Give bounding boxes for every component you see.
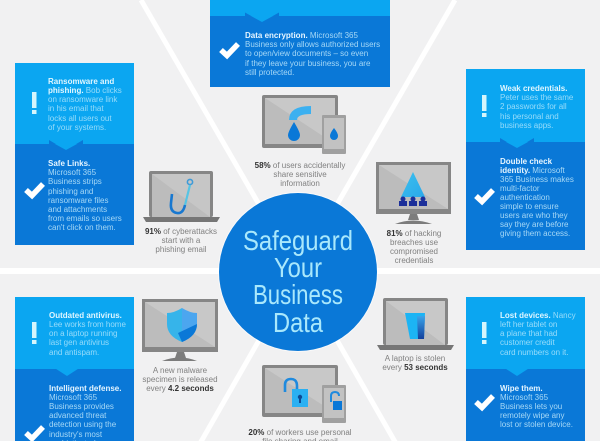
caption: 91% phishing: 91% of cyberattacks bbox=[145, 227, 217, 236]
text: weak credentials problem: Weak credentials. bbox=[500, 84, 567, 93]
panel: data encryption bbox=[210, 0, 390, 87]
panel: outdated antivirus bbox=[15, 297, 134, 441]
text: lost devices problem: a plane that had bbox=[500, 329, 557, 338]
text: wipe them solution: Microsoft 365 bbox=[500, 393, 549, 402]
caption: stolen laptop: A laptop is stolen bbox=[385, 354, 445, 363]
text: double check identity solution: giving them access. bbox=[500, 229, 570, 238]
caption: 81% credentials: 81% of hacking bbox=[387, 229, 441, 238]
icon: check mark bbox=[221, 44, 238, 56]
text: lost devices problem: customer credit bbox=[500, 338, 555, 347]
caption: stolen laptop: every 53 seconds bbox=[382, 363, 448, 372]
text: double check identity solution: simple to ensure bbox=[500, 202, 559, 211]
text: lost devices problem: Lost devices. bbox=[500, 311, 551, 320]
text: data encryption solution: still protected. bbox=[245, 68, 294, 77]
caption: malware specimen: every 4.2 seconds bbox=[146, 384, 214, 393]
text: outdated antivirus problem: Lee works from home bbox=[49, 320, 126, 329]
text: safe links solution: and attachments bbox=[48, 205, 107, 214]
icon: check mark bbox=[476, 190, 493, 202]
caption: 91% phishing: phishing email bbox=[155, 245, 207, 254]
text: outdated antivirus problem: Outdated antivirus. bbox=[49, 311, 122, 320]
text: weak credentials problem: 2 passwords for all bbox=[500, 102, 567, 111]
text: wipe them solution: Wipe them. bbox=[500, 384, 543, 393]
icon: exclamation mark bbox=[482, 95, 486, 117]
text: lost devices problem: Nancy bbox=[551, 311, 576, 320]
panel: ransomware and phishing bbox=[15, 63, 134, 245]
text: weak credentials problem: Peter uses the same bbox=[500, 93, 574, 102]
icon: monitor with shield bbox=[142, 299, 218, 361]
text: outdated antivirus problem: last gen antivirus bbox=[49, 338, 109, 347]
icon: exclamation mark bbox=[32, 322, 36, 344]
text: data encryption solution: to open/view documents – so even bbox=[245, 49, 368, 58]
icon: tablet and phone with open locks bbox=[262, 365, 346, 423]
caption: 81% credentials: breaches use bbox=[390, 238, 439, 247]
text: weak credentials problem: business apps. bbox=[500, 121, 553, 130]
text: data encryption solution: Microsoft 365 bbox=[308, 31, 358, 40]
caption: 81% credentials: compromised bbox=[390, 247, 438, 256]
caption: 58% sensitive information: share sensitive bbox=[273, 170, 327, 179]
text: double check identity solution: Microsoft bbox=[530, 166, 566, 175]
text: outdated antivirus problem: on a laptop running bbox=[49, 329, 118, 338]
text: ransomware problem: Bob clicks bbox=[84, 86, 122, 95]
icon: laptop with trash bin bbox=[377, 298, 454, 350]
text: intelligent defense solution: industry's most bbox=[49, 430, 103, 439]
caption: 58% sensitive information: 58% of users accidentally bbox=[255, 161, 345, 170]
panel: weak credentials bbox=[466, 69, 585, 250]
text: ransomware problem: on ransomware link bbox=[48, 95, 118, 104]
text: ransomware problem: phishing. bbox=[48, 86, 84, 95]
icon: laptop with fishing hook bbox=[143, 171, 220, 222]
panel: lost devices bbox=[466, 297, 585, 441]
text: safe links solution: Business strips bbox=[48, 177, 102, 186]
title text bbox=[243, 225, 353, 338]
icon: tablet and phone with leaking pipe bbox=[262, 95, 346, 154]
text: ransomware problem: of your systems. bbox=[48, 123, 106, 132]
text: ransomware problem: in his email that bbox=[48, 104, 104, 113]
caption: malware specimen: A new malware bbox=[153, 366, 208, 375]
title text: Your bbox=[274, 252, 322, 283]
text: wipe them solution: lost or stolen device. bbox=[500, 420, 573, 429]
text: ransomware problem: locks all users out bbox=[48, 114, 112, 123]
text: data encryption solution: Business only allows authorized users bbox=[245, 40, 380, 49]
icon: check mark bbox=[26, 427, 43, 438]
text: lost devices problem: left her tablet on bbox=[500, 320, 557, 329]
caption: 81% credentials: credentials bbox=[395, 256, 433, 265]
title circle bbox=[218, 192, 378, 352]
text: safe links solution: ransomware files bbox=[48, 196, 108, 205]
text: intelligent defense solution: advanced threat bbox=[49, 411, 107, 420]
icon: monitor with warning triangle bbox=[376, 162, 451, 224]
title text: Data bbox=[273, 307, 323, 338]
text: ransomware problem: Ransomware and bbox=[48, 77, 114, 86]
icon: check mark bbox=[476, 396, 493, 408]
text: double check identity solution: Double check bbox=[500, 157, 553, 166]
text: double check identity solution: multi-factor bbox=[500, 184, 540, 193]
text: wipe them solution: Business lets you bbox=[500, 402, 562, 411]
text: safe links solution: Microsoft 365 bbox=[48, 168, 97, 177]
text: safe links solution: can't click on them. bbox=[48, 223, 116, 232]
text: wipe them solution: remotely wipe any bbox=[500, 411, 564, 420]
text: intelligent defense solution: Microsoft 365 bbox=[49, 393, 98, 402]
text: double check identity solution: users are who they bbox=[500, 211, 568, 220]
icon: check mark bbox=[26, 184, 43, 196]
text: data encryption solution: Data encryption. bbox=[245, 31, 308, 40]
text: outdated antivirus problem: and antispam. bbox=[49, 348, 99, 357]
icon: exclamation mark bbox=[482, 322, 486, 344]
text: intelligent defense solution: Business provides bbox=[49, 402, 114, 411]
text: lost devices problem: card numbers on it. bbox=[500, 348, 568, 357]
text: double check identity solution: 365 Business makes bbox=[500, 175, 574, 184]
title text: Business bbox=[253, 279, 343, 310]
text: safe links solution: Safe Links. bbox=[48, 159, 90, 168]
caption: malware specimen: specimen is released bbox=[142, 375, 218, 384]
text: double check identity solution: authentication bbox=[500, 193, 550, 202]
caption: 58% sensitive information: information bbox=[280, 179, 320, 188]
text: intelligent defense solution: detection using the bbox=[49, 420, 117, 429]
text: intelligent defense solution: Intelligent defense. bbox=[49, 384, 121, 393]
icon: exclamation mark bbox=[32, 92, 36, 114]
caption: 91% phishing: start with a bbox=[162, 236, 201, 245]
text: data encryption solution: if they leave your business, you are bbox=[245, 59, 371, 68]
text: double check identity solution: identity. bbox=[500, 166, 530, 175]
text: safe links solution: from emails so users bbox=[48, 214, 122, 223]
text: safe links solution: phishing and bbox=[48, 187, 93, 196]
text: double check identity solution: say they are before bbox=[500, 220, 569, 229]
caption: 20% personal file sharing: 20% of workers use personal bbox=[248, 428, 352, 437]
text: weak credentials problem: his personal and bbox=[500, 112, 559, 121]
title text: Safeguard bbox=[243, 225, 353, 256]
